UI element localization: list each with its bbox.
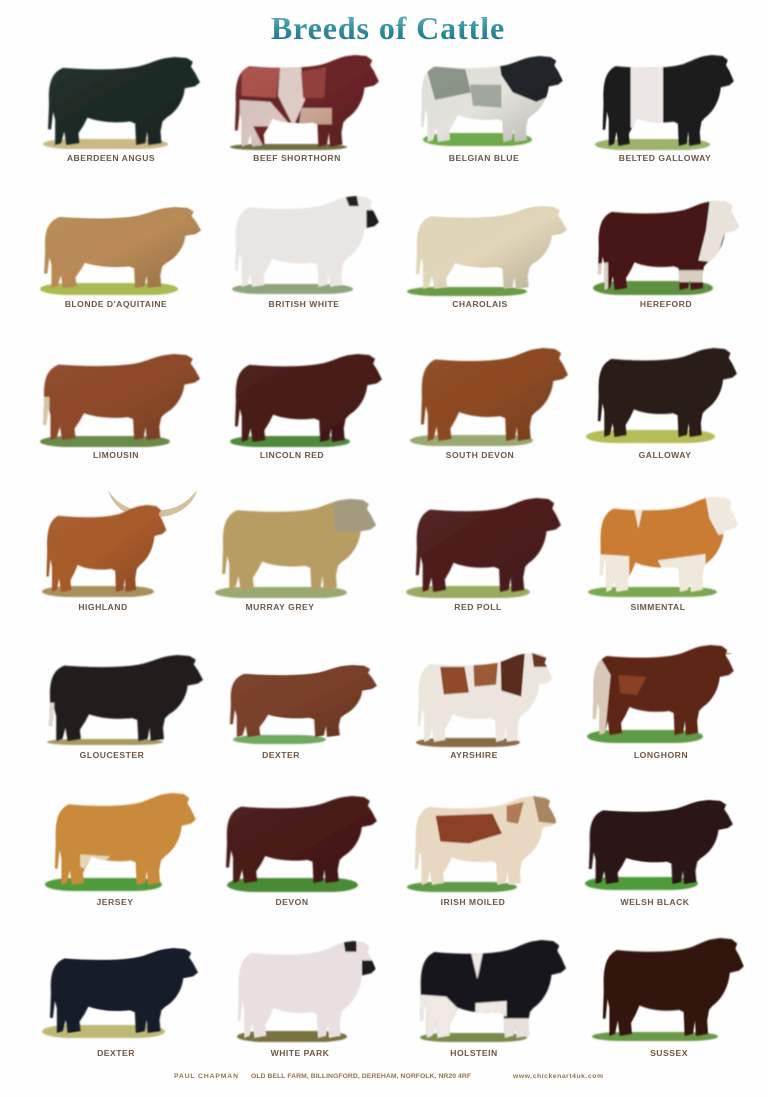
panel: Longhorn [587, 645, 734, 760]
ground [230, 144, 347, 150]
label: RED POLL [454, 602, 502, 612]
panel: Dexter [230, 665, 377, 760]
icon: bull [598, 348, 737, 437]
panel: Belted Galloway [595, 55, 734, 163]
panel: Simmental [588, 497, 740, 612]
panel: Charolais [407, 206, 567, 309]
label: WHITE PARK [271, 1048, 330, 1058]
icon: bull [589, 800, 733, 884]
icon: bull [597, 497, 740, 594]
icon: bull [416, 206, 567, 289]
panel: Highland [42, 490, 197, 612]
ground [233, 735, 326, 744]
icon: bull [238, 941, 378, 1038]
ground [593, 281, 713, 295]
ground [43, 139, 168, 149]
label: HEREFORD [640, 299, 692, 309]
icon: bull [590, 645, 734, 735]
panel: Murray Grey [215, 499, 378, 612]
ground [227, 878, 358, 892]
panel: Aberdeen Angus [43, 57, 200, 163]
icon: bull [235, 196, 381, 287]
panel: Beef Shorthorn [230, 55, 379, 163]
icon: bull [48, 57, 200, 145]
icon: horn [700, 651, 733, 664]
icon: bull [235, 354, 382, 442]
ground [406, 586, 530, 598]
ground [595, 139, 710, 150]
label: HIGHLAND [78, 602, 128, 612]
icon: bull [421, 348, 568, 441]
ground [237, 1031, 347, 1042]
ground [42, 1025, 165, 1038]
panel: Red Poll [406, 498, 561, 612]
panel: White Park [237, 941, 378, 1058]
panel: Lincoln Red [230, 354, 382, 460]
label: LONGHORN [634, 750, 688, 760]
icon: bull [40, 354, 200, 440]
ground [47, 739, 163, 745]
icon: bull [235, 55, 379, 149]
ground [45, 878, 162, 891]
ground [42, 586, 154, 597]
icon: cow [417, 940, 566, 1040]
icon: bull [416, 498, 561, 592]
label: BELTED GALLOWAY [619, 153, 711, 163]
icon: bull [50, 948, 198, 1033]
ground [588, 587, 717, 597]
panel: Belgian Blue [421, 56, 565, 163]
ground [587, 730, 703, 743]
panel: Irish Moiled [407, 796, 557, 907]
label: DEXTER [262, 750, 300, 760]
icon: bull [603, 938, 744, 1036]
credit: website: www.chickenart4uk.com [512, 1073, 603, 1080]
title: Breeds of Cattle [271, 10, 505, 46]
ground [585, 877, 698, 890]
label: IRISH MOILED [441, 897, 505, 907]
icon: cow [55, 793, 196, 885]
ground [215, 587, 347, 598]
panel: Devon [226, 796, 377, 907]
panel: Holstein [417, 940, 566, 1058]
label: MURRAY GREY [245, 602, 315, 612]
label: LINCOLN RED [260, 450, 324, 460]
icon: cow [418, 653, 553, 742]
label: DEVON [275, 897, 309, 907]
credit: name: PAUL CHAPMAN [174, 1073, 238, 1080]
ground [230, 436, 350, 447]
icon: bull [226, 796, 377, 883]
panel: Galloway [586, 348, 737, 460]
label: DEXTER [97, 1048, 135, 1058]
ground [592, 1032, 718, 1041]
ground [407, 882, 517, 892]
label: SUSSEX [650, 1048, 688, 1058]
panel: Gloucester [46, 655, 203, 760]
icon: bull [222, 499, 378, 590]
panel: Limousin [40, 354, 200, 460]
label: BRITISH WHITE [269, 299, 339, 309]
panel: Blonde d'Aquitaine [40, 207, 201, 309]
label: SOUTH DEVON [446, 450, 514, 460]
label: AYRSHIRE [450, 750, 498, 760]
label: BEEF SHORTHORN [253, 153, 341, 163]
label: ABERDEEN ANGUS [67, 153, 155, 163]
ground [40, 283, 178, 295]
icon: horns [108, 490, 197, 517]
ground [423, 133, 532, 146]
icon: bull [230, 665, 377, 737]
label: HOLSTEIN [450, 1048, 498, 1058]
label: JERSEY [97, 897, 133, 907]
icon: bull [46, 655, 203, 741]
panel: South Devon [410, 348, 568, 460]
ground [407, 287, 527, 296]
ground [410, 435, 533, 446]
panel: Hereford [593, 201, 741, 309]
footer credits [174, 1073, 603, 1080]
ground [232, 284, 353, 294]
icon: cow [415, 796, 557, 885]
credit: address: OLD BELL FARM, BILLINGFORD, DEREHAM, NORFOLK. NR20 4RF [251, 1073, 471, 1080]
label: SIMMENTAL [631, 602, 685, 612]
icon: bull [46, 505, 166, 592]
panel: Welsh Black [585, 800, 733, 907]
icon: bull [421, 56, 565, 142]
panel: Sussex [592, 938, 744, 1058]
icon: bull [44, 207, 201, 288]
panel: Ayrshire [416, 653, 553, 760]
label: BELGIAN BLUE [449, 153, 519, 163]
ground [416, 738, 520, 747]
label: GALLOWAY [639, 450, 691, 460]
panel: Dexter (black) [42, 948, 198, 1058]
panel: British White [232, 196, 381, 309]
label: BLONDE D'AQUITAINE [65, 299, 167, 309]
ground [40, 436, 170, 447]
panel: Jersey [45, 793, 196, 907]
ground [586, 430, 715, 443]
icon: bull [595, 201, 741, 292]
label: LIMOUSIN [93, 450, 139, 460]
label: GLOUCESTER [80, 750, 145, 760]
icon: bull [603, 55, 734, 146]
ground [420, 1033, 527, 1042]
label: CHAROLAIS [452, 299, 508, 309]
label: WELSH BLACK [620, 897, 690, 907]
